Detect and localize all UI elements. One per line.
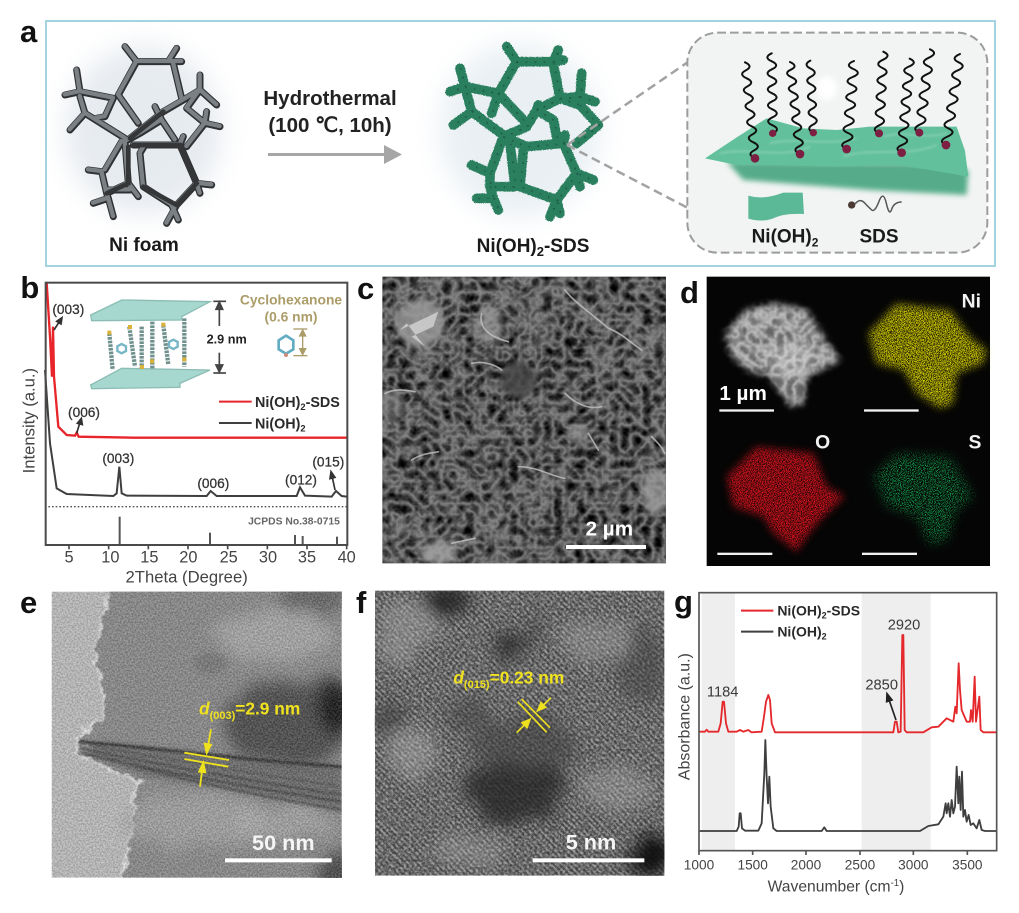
x axis title: 2Theta (Degree) xyxy=(126,568,248,587)
element labels: S xyxy=(969,433,982,454)
shaded bands xyxy=(702,593,931,850)
x tick labels xyxy=(684,857,983,872)
lattice fringes xyxy=(375,591,664,876)
x axis ticks xyxy=(69,545,347,549)
element labels: Ni xyxy=(962,291,981,312)
green Ni(OH)2 sheet xyxy=(705,118,968,177)
scale label: 5 nm xyxy=(566,829,616,854)
legend: Ni(OH) xyxy=(777,602,822,618)
O map xyxy=(727,447,845,552)
d-spacing markers xyxy=(517,698,551,733)
bright nanoflower clusters xyxy=(396,299,444,347)
d-spacing label: (015) xyxy=(464,679,490,691)
JCPDS label: JCPDS No.38-0715 xyxy=(248,516,340,527)
x axis title: ) xyxy=(899,879,904,896)
d-spacing markers xyxy=(184,729,229,787)
y axis title: Absorbance (a.u.) xyxy=(676,653,693,780)
sheet shadow xyxy=(727,162,968,195)
legend: 2 xyxy=(300,402,306,412)
scale bar label: 2 µm xyxy=(586,518,633,541)
hydrothermal condition text: (100 ℃, 10h) xyxy=(268,114,392,137)
d-spacing label: (003) xyxy=(210,710,236,722)
element labels xyxy=(815,291,982,454)
legend: Ni(OH) xyxy=(777,624,822,640)
x tick labels: 15 xyxy=(140,549,158,567)
panel a label: a xyxy=(20,14,38,49)
panel b label: b xyxy=(20,270,39,305)
scale bar xyxy=(533,858,644,862)
inset: layered structure xyxy=(91,300,247,389)
x tick labels: 1000 xyxy=(684,857,715,872)
Ni(OH)2-SDS label: 2 xyxy=(537,244,544,259)
panel g: FTIR chart xyxy=(676,593,997,896)
peak labels: (012) xyxy=(285,473,317,488)
x tick labels: 2000 xyxy=(791,857,822,872)
legend: Ni(OH) xyxy=(255,416,300,432)
SDS head groups xyxy=(751,129,950,163)
peak labels: (006) xyxy=(68,405,100,420)
x tick labels: 35 xyxy=(298,549,316,567)
arrow: process xyxy=(268,145,402,164)
bottom sheet xyxy=(91,368,210,389)
peak labels xyxy=(707,617,920,701)
curve: Ni(OH)2-SDS xyxy=(47,283,347,438)
scale bar xyxy=(566,545,646,549)
panel a: synthesis schematic xyxy=(20,14,995,266)
x tick labels: 3500 xyxy=(952,857,983,872)
scale label: 50 nm xyxy=(252,830,315,855)
scale label: 1 µm xyxy=(719,382,767,405)
legend xyxy=(741,602,860,642)
reference sticks xyxy=(120,517,337,545)
peak labels: 2850 xyxy=(865,677,898,693)
legend: 2 xyxy=(300,423,306,433)
axes frame xyxy=(699,593,997,851)
cyclohexanone annotation xyxy=(240,291,342,357)
peak labels: 2920 xyxy=(888,617,920,633)
d-spacing label: d xyxy=(199,698,210,718)
x tick labels xyxy=(64,549,356,567)
peak arrows xyxy=(54,318,335,490)
bright flake edges xyxy=(385,290,665,543)
peak labels: (006) xyxy=(197,476,229,491)
panel a frame xyxy=(46,21,995,266)
scale bars xyxy=(717,409,919,555)
x tick labels: 3000 xyxy=(898,857,929,872)
sheet body xyxy=(75,585,350,885)
x tick labels: 30 xyxy=(259,549,277,567)
axes frame xyxy=(46,283,347,545)
d-spacing label: d xyxy=(453,667,464,687)
legend label: Ni(OH)2: Ni(OH) xyxy=(752,227,812,248)
panel f label: f xyxy=(356,585,367,620)
legend: -SDS xyxy=(306,395,340,411)
element labels: O xyxy=(815,433,830,454)
legend: Ni(OH) xyxy=(255,395,300,411)
legend: 2 xyxy=(822,610,827,620)
y axis title: Intensity (a.u.) xyxy=(20,368,39,473)
hydrothermal condition text: Hydrothermal xyxy=(263,87,397,110)
x axis title: Wavenumber (cm xyxy=(768,879,891,896)
spacing value: 2.9 nm xyxy=(207,332,247,346)
Ni map xyxy=(868,303,987,408)
peak labels: 1184 xyxy=(707,685,738,701)
legend icon: Ni(OH)2 sheet xyxy=(748,193,804,221)
panel e label: e xyxy=(20,585,37,620)
d-spacing label: =0.23 nm xyxy=(490,667,564,687)
top sheet xyxy=(91,300,210,321)
x axis ticks xyxy=(699,851,967,855)
image: Ni(OH)2-SDS foam xyxy=(440,43,600,217)
legend label: SDS: SDS xyxy=(859,227,899,248)
layered fringes xyxy=(87,742,342,812)
inset: SDS intercalated sheet xyxy=(687,33,987,253)
panel c: SEM image xyxy=(378,277,672,565)
panel d: elemental mapping xyxy=(707,277,990,566)
peak labels xyxy=(52,302,344,491)
x tick labels: 5 xyxy=(64,549,74,567)
legend: -SDS xyxy=(827,602,860,618)
panel e: TEM image xyxy=(52,592,342,878)
spacing dimension xyxy=(213,301,226,373)
peak labels: (003) xyxy=(102,451,134,466)
reference divider xyxy=(48,505,347,509)
image: Ni foam xyxy=(65,45,222,223)
d-spacing label: =2.9 nm xyxy=(235,698,300,718)
Ni foam label: Ni foam xyxy=(109,235,179,256)
legend label: Ni(OH)2: 2 xyxy=(812,236,819,250)
HAADF map xyxy=(725,303,840,407)
legend: 2 xyxy=(822,632,827,642)
x tick labels: 25 xyxy=(220,549,238,567)
x tick labels: 1500 xyxy=(737,857,768,872)
x tick labels: 40 xyxy=(338,549,356,567)
curve: Ni(OH)2 xyxy=(45,370,347,497)
panel d label: d xyxy=(680,275,699,310)
arrow: 2850 peak xyxy=(887,694,896,720)
x tick labels: 10 xyxy=(101,549,119,567)
panel f: HRTEM image xyxy=(372,587,672,876)
zoom leader lines xyxy=(567,62,688,208)
sulfate heads xyxy=(107,323,186,369)
x tick labels: 20 xyxy=(179,549,197,567)
scale bar xyxy=(225,858,332,862)
panel b: XRD chart xyxy=(20,270,356,587)
inset background xyxy=(687,33,987,253)
S map xyxy=(873,453,973,545)
curve: Ni(OH)2-SDS xyxy=(699,635,996,732)
x axis title: -1 xyxy=(891,878,899,889)
Ni(OH)2-SDS label: Ni(OH) xyxy=(477,236,537,257)
cyclohexanone annotation: (0.6 nm) xyxy=(264,309,318,325)
hydrothermal condition text xyxy=(263,87,397,137)
curve: Ni(OH)2 xyxy=(699,740,996,831)
SDS chains xyxy=(742,49,963,158)
intercalated chains xyxy=(109,318,184,370)
cyclohexanone annotation: Cyclohexanone xyxy=(240,291,342,307)
cyclohexanone molecules in gallery xyxy=(117,340,178,353)
legend icon: SDS xyxy=(848,196,902,212)
dark and bright regions xyxy=(372,587,672,873)
legend xyxy=(219,395,340,433)
panel c label: c xyxy=(357,271,374,306)
peak labels: (003) xyxy=(52,302,84,317)
x tick labels: 2500 xyxy=(845,857,876,872)
Ni(OH)2-SDS label: -SDS xyxy=(544,236,589,257)
panel g label: g xyxy=(674,584,693,619)
peak labels: (015) xyxy=(312,454,344,469)
